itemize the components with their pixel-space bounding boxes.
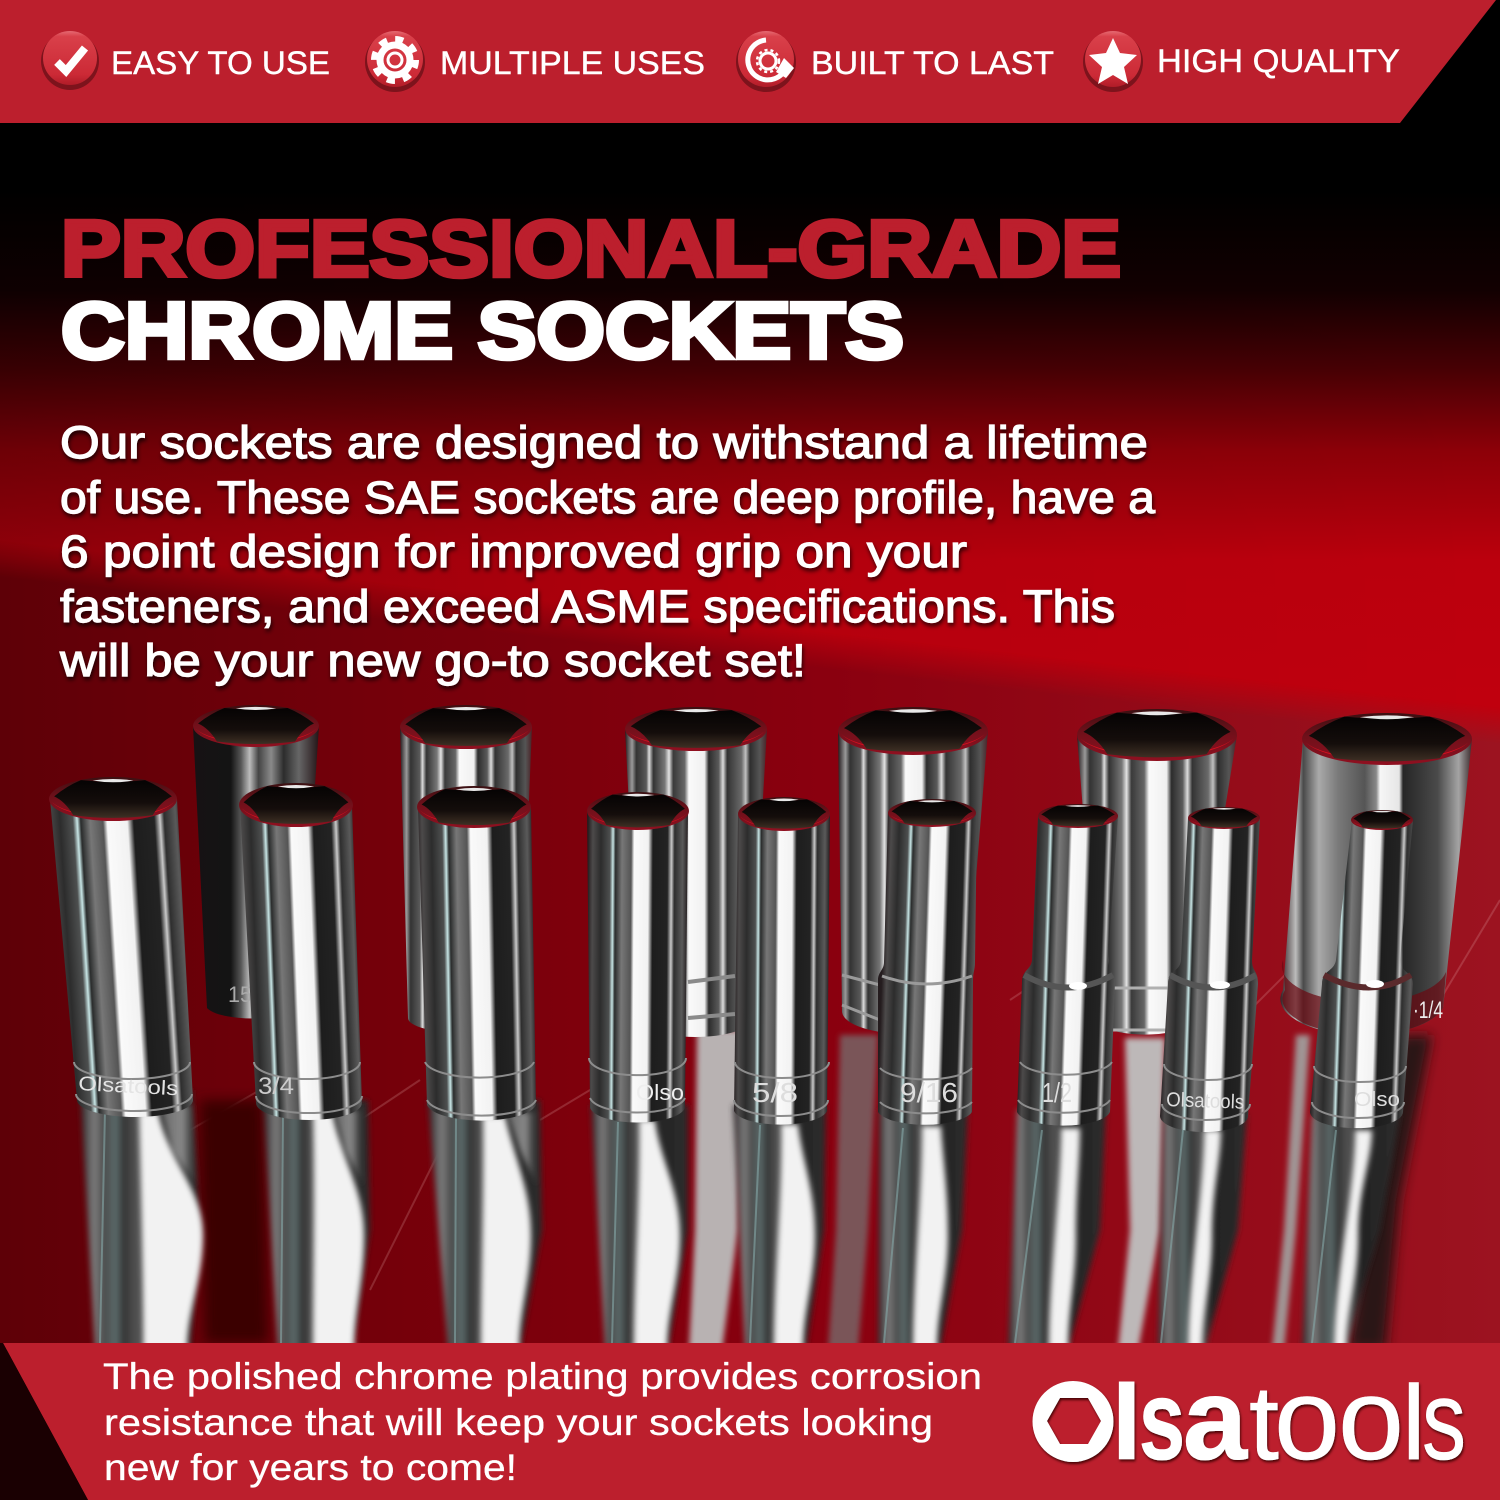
label: HIGH QUALITY — [1157, 43, 1400, 79]
logo wordmark: l — [1112, 1364, 1141, 1482]
body text: of use. These SAE sockets are deep profile, have a — [60, 472, 1156, 523]
socket 4: Olso — [636, 1080, 684, 1105]
reflection: socket 3 — [428, 1100, 542, 1350]
reflection: back socket 5 — [1118, 1038, 1165, 1350]
socket 4 — [587, 792, 689, 1123]
back socket 6 — [1280, 713, 1472, 1035]
socket 7: 1/2 — [1042, 1077, 1072, 1108]
body text — [59, 417, 1156, 686]
label: MULTIPLE USES — [440, 45, 705, 81]
reflection: back socket 1 — [200, 1100, 268, 1343]
icon: check mark — [41, 31, 99, 90]
reflection: socket 1 — [80, 1090, 203, 1350]
socket 2 — [239, 783, 362, 1120]
top banner — [0, 0, 1496, 123]
banner shape — [3, 1343, 1500, 1500]
caption text: resistance that will keep your sockets looking — [104, 1402, 933, 1443]
back socket 6: ·1/4 — [1413, 997, 1443, 1024]
logo wordmark: t — [1249, 1364, 1279, 1482]
label: BUILT TO LAST — [811, 45, 1054, 81]
socket 7 — [1017, 804, 1118, 1126]
logo wordmark: s — [1139, 1358, 1185, 1483]
caption text: new for years to come! — [104, 1447, 517, 1488]
body text: will be your new go-to socket set! — [59, 635, 806, 686]
reflection: socket 5 — [733, 1105, 826, 1350]
reflection: socket 7 — [1008, 1110, 1106, 1350]
reflection: back socket 3 — [689, 1030, 742, 1350]
icon: star — [1083, 31, 1143, 92]
reflection: back socket 6 — [1272, 1035, 1310, 1350]
back socket 5 — [1077, 709, 1237, 1035]
reflection: socket 9 — [1302, 1035, 1432, 1350]
background: red wall — [0, 0, 1500, 1000]
logo wordmark: s — [1422, 1358, 1466, 1483]
corner fill — [0, 1343, 88, 1500]
logo wordmark: l — [1402, 1364, 1426, 1482]
back socket 4 — [838, 707, 988, 1034]
socket 1: Olsatools — [78, 1073, 179, 1100]
logo wordmark: a — [1183, 1354, 1248, 1484]
feature: high quality — [1083, 31, 1400, 92]
reflection: socket 8 — [1158, 1115, 1247, 1350]
feature: easy to use — [41, 31, 330, 90]
caption text: The polished chrome plating provides corrosion — [103, 1356, 982, 1397]
body text: 6 point design for improved grip on your — [60, 526, 967, 577]
socket 9: Olso — [1354, 1089, 1400, 1111]
reflection: back socket 4 — [828, 1035, 878, 1350]
label: EASY TO USE — [111, 45, 330, 81]
back socket 1: 15 — [228, 982, 252, 1007]
logo: Olsatools — [1032, 1354, 1466, 1484]
socket 5: 5/8 — [752, 1077, 798, 1108]
reflections of sockets on the floor — [80, 1030, 1432, 1350]
socket 1 — [49, 777, 193, 1117]
back socket 1 — [193, 705, 319, 1019]
socket 6 — [878, 799, 977, 1125]
caption text — [103, 1356, 982, 1488]
floor scratches — [190, 880, 1500, 1290]
heading line 1: PROFESSIONAL-GRADE — [61, 204, 1121, 293]
socket 9 — [1310, 810, 1413, 1128]
heading — [61, 204, 1121, 375]
bottom banner — [0, 1343, 1500, 1500]
back socket 3 — [625, 707, 767, 1037]
body text: Our sockets are designed to withstand a lifetime — [60, 417, 1148, 468]
back socket 2 — [400, 705, 532, 1033]
socket 3 — [417, 786, 536, 1121]
socket set — [49, 705, 1472, 1132]
logo wordmark: o — [1338, 1354, 1404, 1484]
background: wall left shade — [0, 0, 1500, 800]
icon: gear — [365, 31, 425, 92]
reflection: socket 2 — [263, 1100, 370, 1350]
logo mark: hex nut O — [1032, 1381, 1114, 1462]
socket 8: Olsatools — [1166, 1089, 1245, 1114]
logo wordmark — [1112, 1354, 1466, 1484]
banner shape — [0, 0, 1496, 123]
feature: built to last — [736, 31, 1054, 92]
reflection: socket 4 — [591, 1105, 688, 1350]
heading line 2: CHROME SOCKETS — [61, 286, 904, 375]
logo wordmark: o — [1274, 1354, 1340, 1484]
socket 6: 9/16 — [900, 1077, 958, 1108]
feature: multiple uses — [365, 31, 705, 92]
icon: cycle gear — [736, 31, 796, 92]
socket 2: 3/4 — [258, 1073, 294, 1100]
socket 5 — [734, 797, 830, 1125]
body text: fasteners, and exceed ASME specifications. This — [60, 581, 1115, 632]
socket 8 — [1160, 807, 1260, 1132]
reflection: socket 6 — [878, 1110, 968, 1350]
background: polished floor — [0, 500, 1500, 1350]
